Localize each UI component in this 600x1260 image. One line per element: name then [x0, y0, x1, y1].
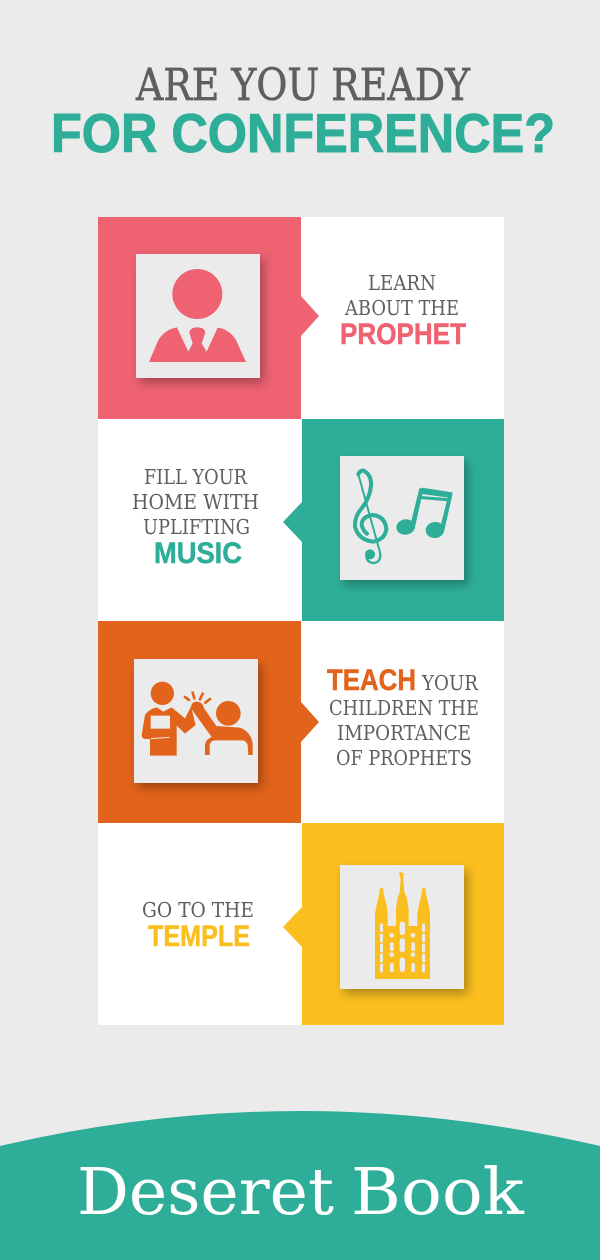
icon: teacher and child high five [134, 659, 258, 783]
title [51, 60, 555, 164]
logo wordmark: Book [351, 1155, 525, 1230]
logo wordmark: Deseret [77, 1155, 334, 1230]
panel: go to the temple [98, 823, 504, 1025]
step text: TEMPLE [148, 920, 250, 953]
step text [340, 271, 466, 351]
arrow: yellow pointer [283, 907, 302, 947]
panel: fill your home with music [98, 419, 504, 621]
step text: OF PROPHETS [336, 746, 472, 770]
step text: TEACH [327, 664, 416, 697]
step text: PROPHET [340, 318, 466, 351]
panel: teach your children [98, 621, 504, 823]
step text [142, 898, 254, 953]
icon: music notes [340, 456, 464, 580]
title: FOR CONFERENCE? [51, 102, 555, 164]
step text: ABOUT THE [344, 296, 459, 320]
step text [132, 465, 259, 570]
step text [327, 664, 479, 770]
panel: learn about the prophet [98, 217, 504, 419]
arrow: orange pointer [301, 702, 319, 742]
title: ARE YOU READY [135, 60, 471, 111]
step text: UPLIFTING [143, 515, 250, 539]
footer: teal arc with logo [0, 1111, 600, 1260]
step text: IMPORTANCE [337, 721, 471, 745]
arrow: pink pointer [301, 296, 319, 336]
step text: LEARN [368, 271, 436, 295]
arrow: teal pointer [283, 502, 302, 542]
step text: CHILDREN THE [329, 696, 479, 720]
step text: MUSIC [154, 537, 242, 570]
icon: person in suit [136, 254, 260, 378]
step text: GO TO THE [142, 898, 254, 922]
step text: YOUR [421, 671, 478, 695]
step text: FILL YOUR [144, 465, 247, 489]
icon: temple [340, 865, 464, 989]
logo wordmark [77, 1155, 525, 1230]
step text: HOME WITH [132, 490, 259, 514]
